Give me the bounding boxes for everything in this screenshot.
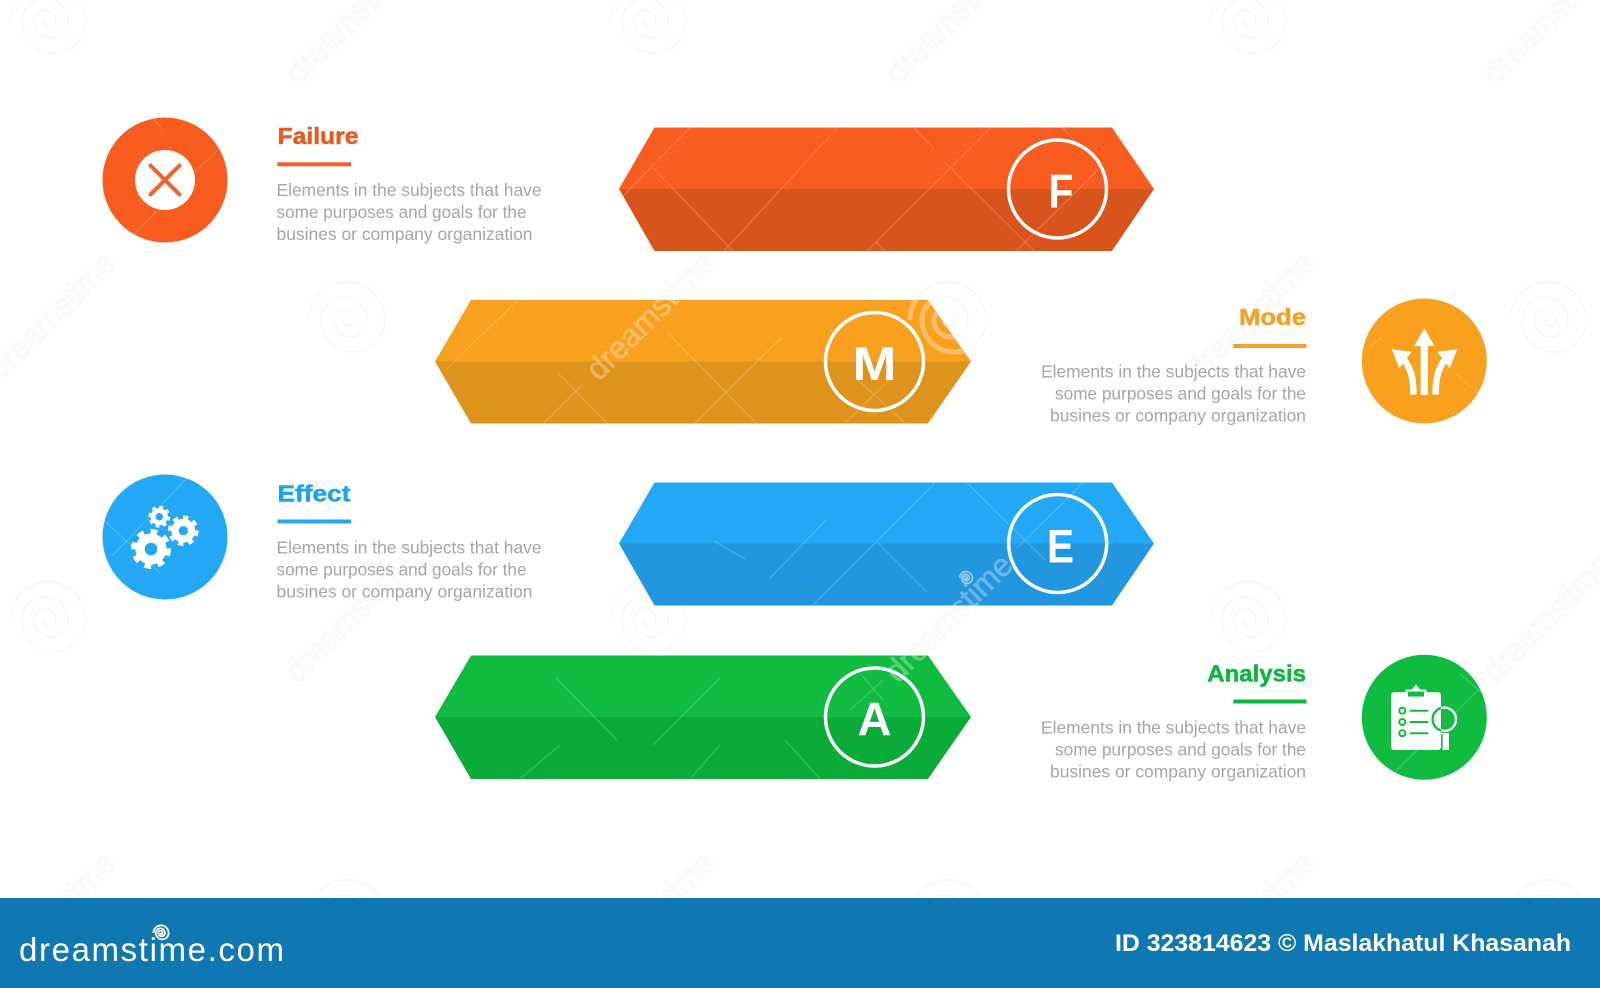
panel: Effect (102, 474, 1154, 606)
footer logo: dreamstime.com (19, 931, 284, 968)
background watermark: dreamstime (277, 547, 420, 689)
hexagonal bar: E (619, 482, 1154, 606)
heading: Effect: Effect (278, 480, 351, 506)
heading: Mode: Mode (1239, 304, 1306, 330)
text block: Effect description: busines or company organization (276, 581, 532, 601)
icon: diverging arrows (1362, 298, 1487, 424)
background watermark: dreamstime (1178, 245, 1321, 387)
text block: Mode description (1041, 361, 1306, 425)
letter badge: A: A (858, 692, 891, 746)
text block: Analysis description (1041, 717, 1306, 781)
letter badge: A (826, 668, 924, 766)
text block: Failure description: some purposes and goals for the (276, 202, 526, 222)
background watermark: dreamstime (578, 845, 721, 987)
text block: Effect description: some purposes and goals for the (276, 559, 526, 579)
text block: Effect description (276, 537, 542, 601)
text block: Mode description: busines or company organization (1050, 405, 1306, 425)
letter badge: M (826, 312, 924, 410)
letter badge: M: M (852, 337, 896, 390)
footer bar (0, 898, 1600, 988)
text block: Failure description: Elements in the subjects that have (276, 180, 542, 200)
underline: Mode (1233, 344, 1306, 348)
hexagonal bar: A: dreamstime (877, 547, 1020, 689)
panel: Failure (102, 118, 1154, 251)
panel: Mode (435, 298, 1487, 425)
text block: Mode description: Elements in the subjects that have (1041, 361, 1306, 381)
panel: Analysis (435, 654, 1487, 781)
heading: Analysis: Analysis (1207, 660, 1306, 686)
footer credit: ID 323814623 © Maslakhatul Khasanah (1115, 930, 1571, 957)
text block: Failure description: busines or company organization (276, 224, 532, 244)
letter badge: E: E (1047, 519, 1074, 572)
icon: gears (102, 474, 228, 600)
underline: Effect (278, 520, 351, 524)
letter badge: F (1008, 140, 1106, 238)
text block: Analysis description: busines or company organization (1050, 761, 1306, 781)
icon: clipboard with magnifier (1362, 655, 1487, 780)
background watermark: dreamstime (1178, 845, 1321, 987)
hexagonal bar: M: dreamstime (578, 245, 721, 387)
icon: failure cross (102, 118, 228, 242)
text block: Failure description (276, 180, 542, 244)
hexagonal bar: E: dreamstime (877, 547, 1020, 689)
heading: Failure: Failure (278, 123, 358, 149)
underline: Failure (278, 162, 351, 166)
text block: Analysis description: Elements in the subjects that have (1041, 717, 1306, 737)
background watermark: dreamstime (877, 547, 1020, 689)
hexagonal bar: M (435, 300, 971, 424)
letter badge: E (1009, 494, 1107, 592)
underline: Analysis (1233, 700, 1306, 704)
hexagonal bar: A (435, 656, 971, 779)
text block: Analysis description: some purposes and goals for the (1055, 739, 1306, 759)
hexagonal bar: F (619, 127, 1154, 251)
letter badge: F: F (1048, 164, 1074, 218)
background watermark: dreamstime (578, 245, 721, 387)
text block: Mode description: some purposes and goals for the (1055, 383, 1306, 403)
text block: Effect description: Elements in the subjects that have (276, 537, 542, 557)
